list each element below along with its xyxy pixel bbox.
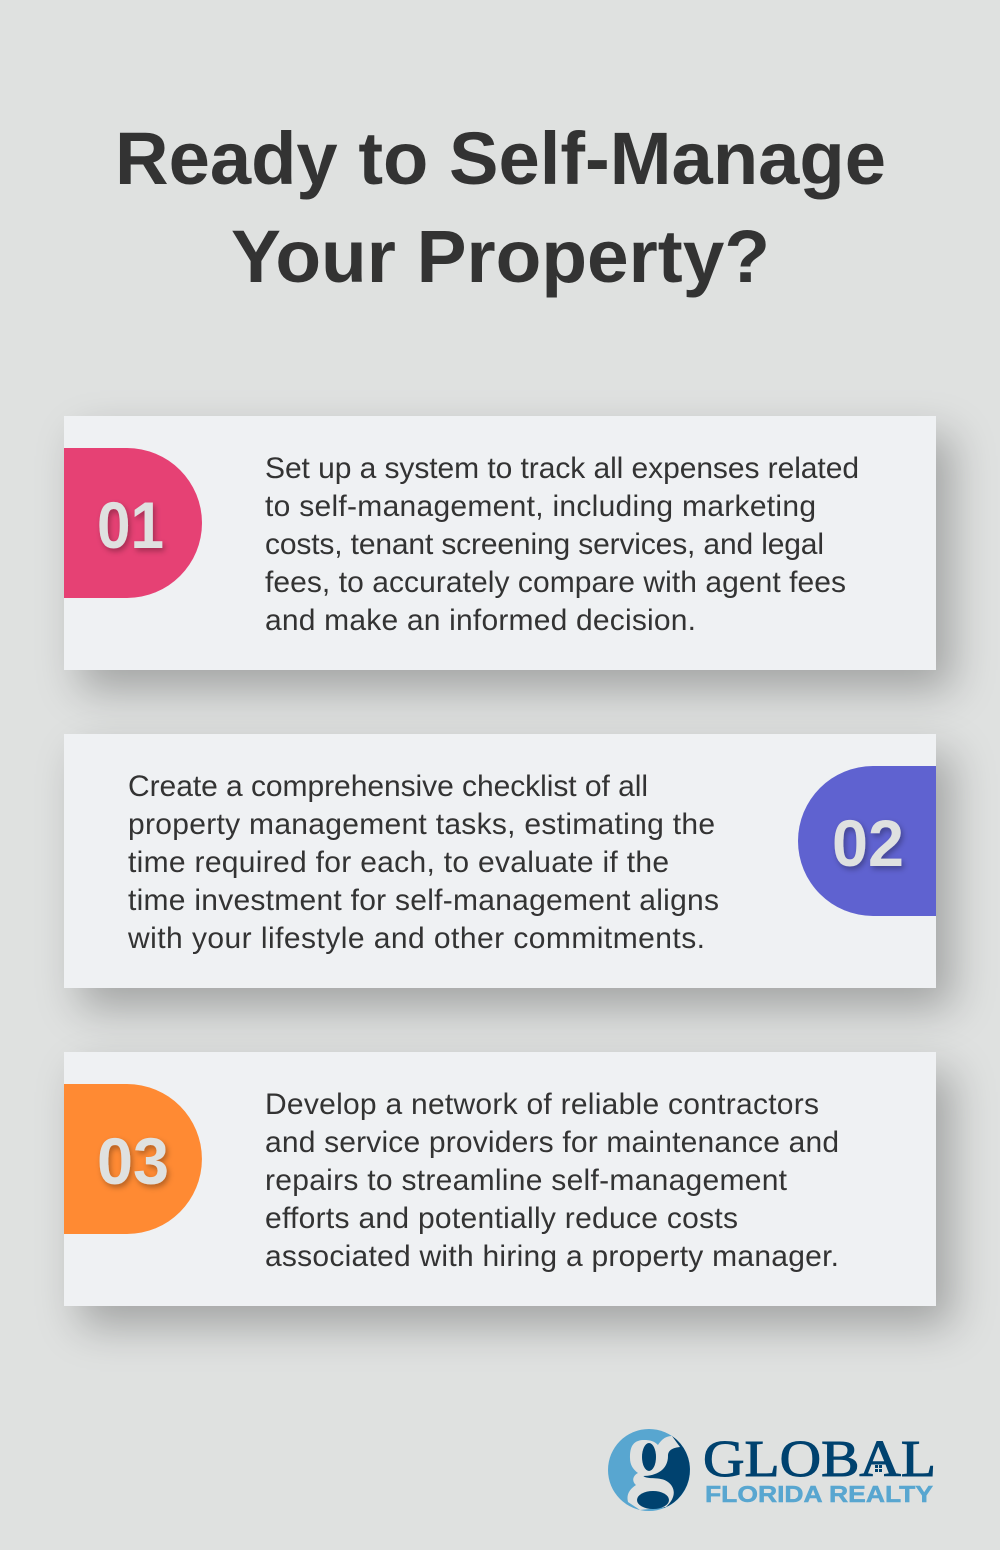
text block: step 1: fees, to accurately compare with agent fees — [265, 566, 846, 599]
title — [115, 117, 886, 298]
text block: step 3: and service providers for maintenance and — [265, 1126, 839, 1159]
badge: step 03: 03 — [97, 1124, 169, 1198]
badge: step 03 — [64, 1084, 202, 1234]
icon: g monogram — [608, 1429, 690, 1511]
text block: step 3: associated with hiring a property manager. — [265, 1240, 839, 1273]
title: Ready to Self-Manage — [115, 117, 886, 200]
text block: step 2: time investment for self-management aligns — [128, 884, 719, 917]
text block: step 2: Create a comprehensive checklist of all — [128, 770, 648, 803]
panel: step 2 card background — [64, 734, 936, 988]
logo: Global Florida Realty — [608, 1429, 936, 1511]
logo wordmark: Florida Realty: FLORIDA REALTY — [705, 1481, 933, 1507]
text block: step 1: costs, tenant screening services, and legal — [265, 528, 824, 561]
text block: step 1 — [265, 452, 859, 637]
panel: step 3 card background — [64, 1052, 936, 1306]
text block: step 1: Set up a system to track all expenses related — [265, 452, 859, 485]
logo wordmark: GLOBAL: GLOBAL — [703, 1431, 936, 1488]
text block: step 2: with your lifestyle and other commitments. — [127, 922, 705, 955]
text block: step 3 — [265, 1088, 839, 1273]
badge: step 02: 02 — [832, 806, 904, 880]
text block: step 1: to self-management, including marketing — [265, 490, 816, 523]
text block: step 3: efforts and potentially reduce costs — [265, 1202, 738, 1235]
text block: step 2: property management tasks, estimating the — [128, 808, 715, 841]
panel: step 1 card background — [64, 416, 936, 670]
badge: step 02 — [798, 766, 936, 916]
badge: step 01 — [64, 448, 202, 598]
text block: step 2: time required for each, to evaluate if the — [128, 846, 669, 879]
text block: step 1: and make an informed decision. — [265, 604, 696, 637]
text block: step 2 — [127, 770, 719, 955]
text block: step 3: Develop a network of reliable contractors — [265, 1088, 819, 1121]
badge: step 01: 01 — [97, 488, 164, 562]
text block: step 3: repairs to streamline self-management — [265, 1164, 788, 1197]
title: Your Property? — [231, 215, 770, 298]
icon: house window — [875, 1465, 882, 1472]
